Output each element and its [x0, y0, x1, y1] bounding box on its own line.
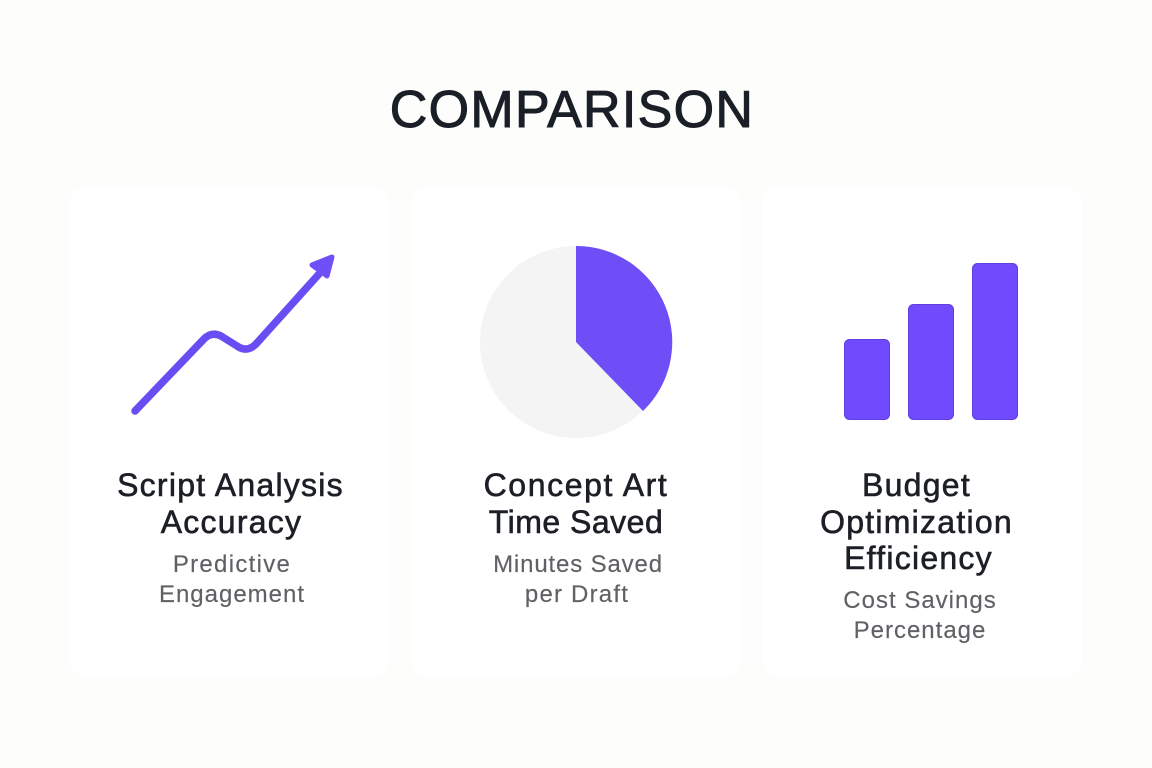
heading: budget optimization efficiency: Budget — [862, 467, 971, 503]
text: cost savings percentage — [843, 587, 997, 644]
heading: budget optimization efficiency — [820, 467, 1013, 576]
icon: pie chart — [480, 246, 672, 438]
panel: budget optimization — [762, 186, 1082, 677]
heading: script analysis accuracy — [117, 467, 344, 540]
text: cost savings percentage: Cost Savings — [843, 587, 997, 614]
icon: rising arrow line — [131, 254, 334, 415]
text: minutes saved per draft: per Draft — [525, 581, 629, 608]
heading: concept art time saved — [484, 467, 668, 540]
heading: concept art time saved: Concept Art — [484, 467, 668, 503]
panel: concept art — [411, 186, 741, 677]
text: predictive engagement — [159, 551, 305, 608]
panel: script analysis — [69, 186, 389, 677]
heading: script analysis accuracy: Script Analysis — [117, 467, 344, 503]
heading: concept art time saved: Time Saved — [489, 504, 663, 540]
text: minutes saved per draft: Minutes Saved — [493, 551, 663, 578]
heading: script analysis accuracy: Accuracy — [161, 504, 302, 540]
icon: bar chart — [844, 263, 1018, 420]
heading: budget optimization efficiency: Efficiency — [844, 540, 993, 576]
text: cost savings percentage: Percentage — [854, 617, 986, 644]
heading: budget optimization efficiency: Optimization — [820, 504, 1013, 540]
text: predictive engagement: Predictive — [173, 551, 291, 578]
title: COMPARISON — [390, 81, 754, 139]
text: predictive engagement: Engagement — [159, 581, 305, 608]
text: minutes saved per draft — [493, 551, 663, 608]
